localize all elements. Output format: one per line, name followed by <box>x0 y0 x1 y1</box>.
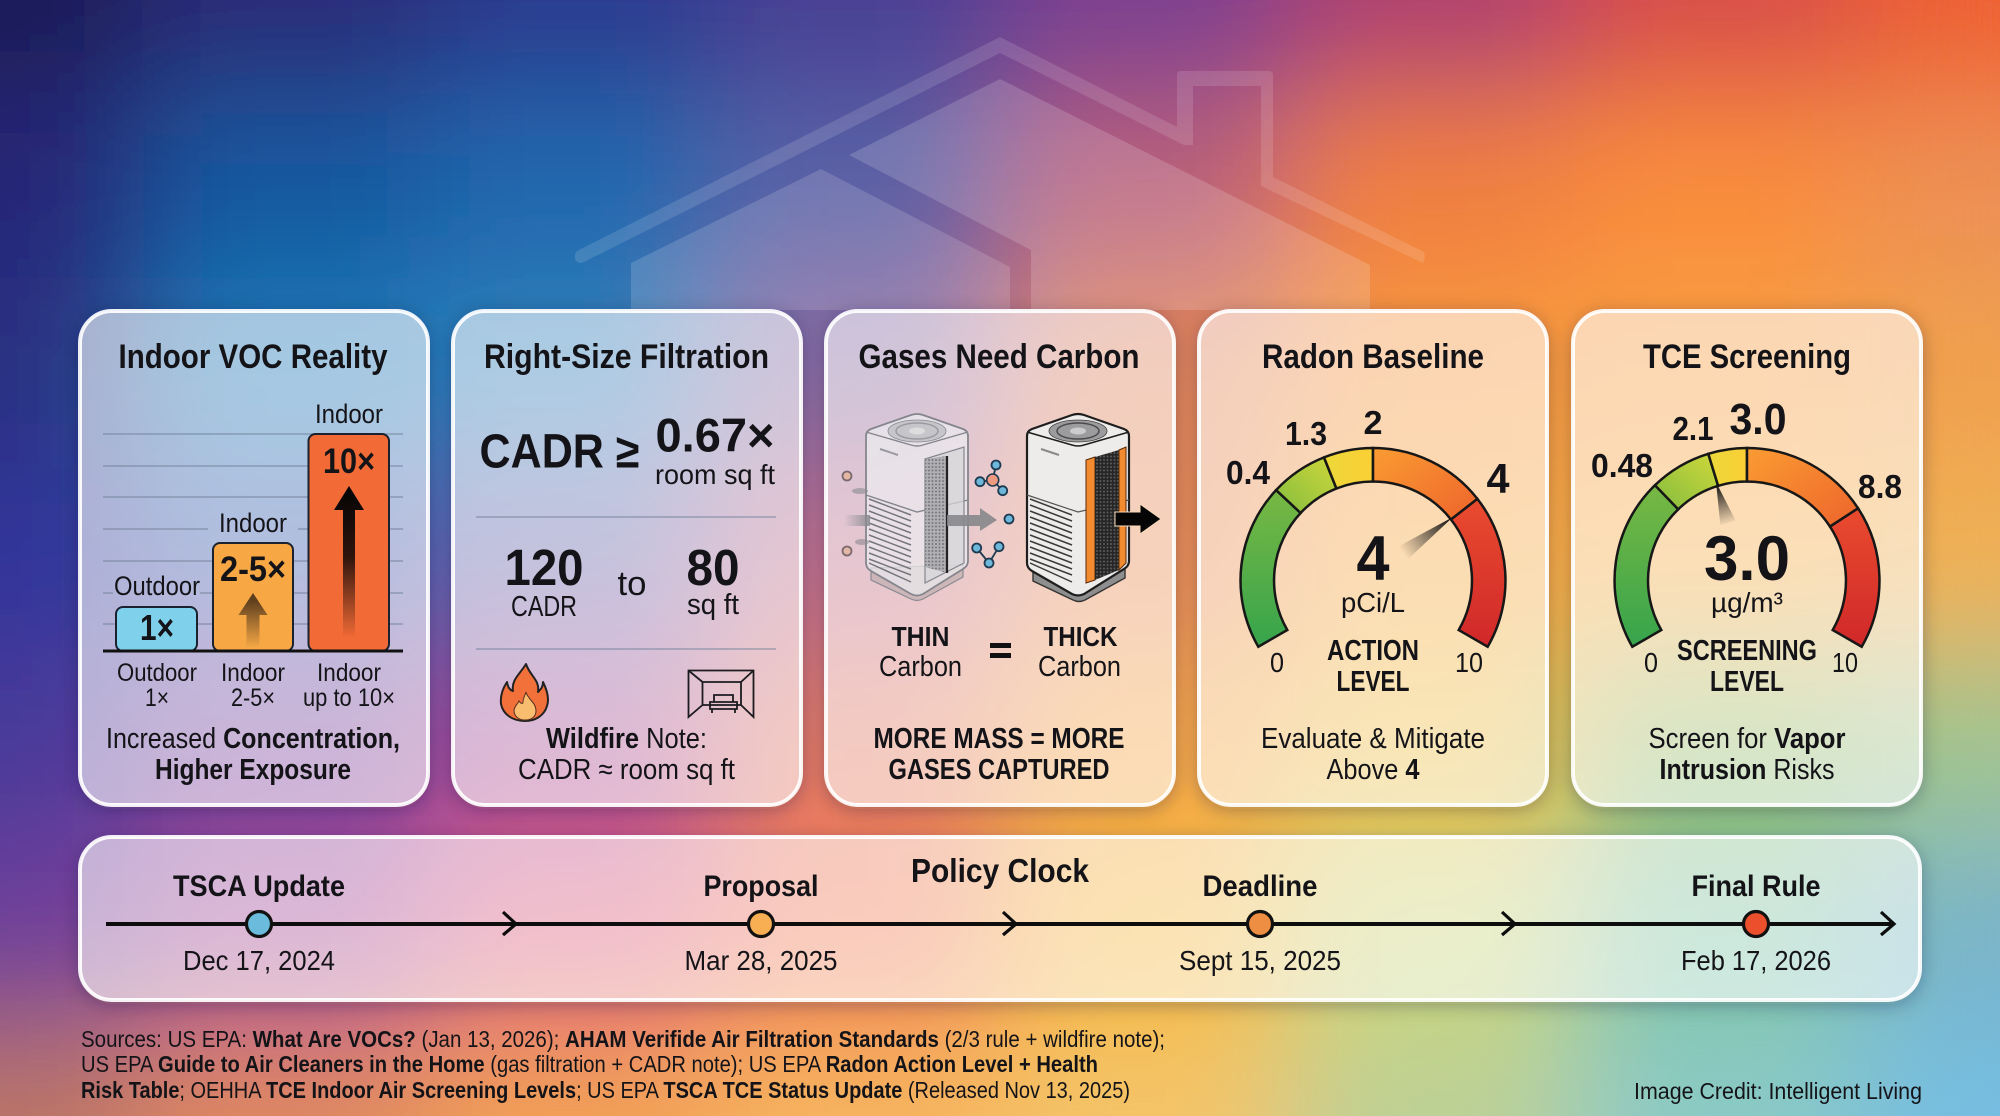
gauge: radon: pCi/L <box>1341 587 1405 618</box>
wildfire note: Wildfire Note: <box>546 723 707 755</box>
gauge: TCE: SCREENING <box>1677 635 1817 667</box>
gauge: TCE: 2.1 <box>1672 410 1714 447</box>
card background <box>80 311 428 805</box>
axis labels: Indoor <box>221 659 285 687</box>
gauge: radon <box>1226 404 1510 698</box>
bar: outdoor: Outdoor <box>114 571 200 601</box>
bar: indoor 10x: 10× <box>323 442 375 481</box>
axis labels: 1× <box>145 684 169 712</box>
gauge needle <box>1716 482 1736 525</box>
card background <box>1199 311 1547 805</box>
bar: indoor 2-5x: Indoor <box>219 508 287 538</box>
icon: thin carbon purifier <box>866 414 968 600</box>
caption: Higher Exposure <box>155 754 351 786</box>
heading: Gases Need Carbon <box>858 338 1140 376</box>
axis labels: Indoor <box>317 659 381 687</box>
formula: room sq ft <box>655 459 775 490</box>
heading: TCE Screening <box>1643 338 1851 376</box>
card shadows <box>80 315 1921 1004</box>
caption: Screen for Vapor <box>1648 723 1846 755</box>
comparison labels: THICK <box>1044 621 1118 652</box>
panel: Right-Size Filtration <box>453 311 801 805</box>
heading: Policy Clock <box>911 852 1090 889</box>
example ratio: CADR <box>511 591 577 623</box>
caption: MORE MASS = MORE <box>874 723 1124 755</box>
caption: Intrusion Risks <box>1660 754 1834 786</box>
gauge: TCE: 8.8 <box>1858 468 1902 505</box>
panel: Indoor VOC Reality <box>80 311 428 805</box>
icon: flame <box>501 664 548 721</box>
bar: indoor 10x <box>308 399 389 651</box>
caption <box>874 723 1124 786</box>
icon: background house silhouette <box>575 37 1425 310</box>
comparison labels: Carbon <box>1038 651 1121 683</box>
gauge: radon: LEVEL <box>1336 666 1410 698</box>
heading: Indoor VOC Reality <box>118 338 388 376</box>
milestone: Final Rule <box>1681 870 1831 976</box>
sources: US EPA Guide to Air Cleaners in the Home (gas filtration + CADR note); US EPA Radon Action Level + Health <box>81 1051 1098 1077</box>
sources <box>81 1026 1165 1103</box>
milestone: Deadline <box>1179 870 1341 976</box>
example ratio: sq ft <box>687 589 739 621</box>
gauge: TCE: LEVEL <box>1710 666 1784 698</box>
milestone: Deadline: Deadline <box>1202 870 1318 903</box>
caption <box>1261 723 1485 786</box>
gauge: TCE: 3.0 <box>1730 395 1786 444</box>
bar: outdoor <box>114 571 200 651</box>
gauge: TCE: 0 <box>1644 647 1658 678</box>
example ratio: to <box>618 565 646 603</box>
bar chart <box>103 399 403 651</box>
caption <box>1648 723 1846 786</box>
heading: Radon Baseline <box>1262 338 1484 376</box>
sources: Risk Table; OEHHA TCE Indoor Air Screening Levels; US EPA TSCA TCE Status Update (Released Nov 13, 2025) <box>81 1077 1130 1103</box>
image credit: Image Credit: Intelligent Living <box>1634 1078 1922 1104</box>
comparison labels <box>879 621 1121 683</box>
card background <box>1573 311 1921 805</box>
axis labels <box>117 659 395 712</box>
caption: Evaluate & Mitigate <box>1261 723 1485 755</box>
formula <box>480 408 775 490</box>
gauge: TCE: 0.48 <box>1591 447 1653 484</box>
milestone: Final Rule: Feb 17, 2026 <box>1681 945 1831 976</box>
milestone: Final Rule: Final Rule <box>1692 870 1820 903</box>
panel: TCE Screening <box>1573 311 1921 805</box>
gauge: radon: 4 <box>1356 524 1390 594</box>
bar: outdoor: 1× <box>140 607 174 648</box>
milestone: Deadline: Sept 15, 2025 <box>1179 945 1341 976</box>
wildfire note: CADR ≈ room sq ft <box>518 754 735 786</box>
heading: Right-Size Filtration <box>484 338 769 376</box>
milestone: Proposal: Proposal <box>704 870 818 903</box>
gauge: radon: 0.4 <box>1226 454 1271 491</box>
gauge: radon: 10 <box>1455 647 1483 678</box>
gauge: TCE: 3.0 <box>1704 524 1790 594</box>
panel: Radon Baseline <box>1199 311 1547 805</box>
panel: Gases Need Carbon <box>826 311 1174 805</box>
comparison labels: Carbon <box>879 651 962 683</box>
example ratio <box>504 539 740 623</box>
card background <box>826 311 1174 805</box>
example ratio: 120 <box>504 539 584 596</box>
card background <box>80 837 1920 1000</box>
bar: indoor 2-5x: 2-5× <box>220 550 286 589</box>
wildfire note <box>518 723 735 786</box>
sources: Sources: US EPA: What Are VOCs? (Jan 13, 2026); AHAM Verifide Air Filtration Standards (2/3 rule + wildfire note); <box>81 1026 1165 1052</box>
example ratio: 80 <box>686 539 740 596</box>
icon: thick carbon purifier <box>1027 414 1161 602</box>
panel: Policy Clock timeline <box>80 837 1920 1000</box>
milestone: TSCA Update: TSCA Update <box>173 870 345 903</box>
gauge: radon: 0 <box>1270 647 1284 678</box>
gauge: TCE <box>1591 395 1902 698</box>
gauge: radon: 1.3 <box>1285 415 1327 452</box>
icon: room with bed <box>688 670 754 717</box>
axis labels: up to 10× <box>303 684 395 712</box>
bar: indoor 10x: Indoor <box>315 399 383 429</box>
milestone: Proposal: Mar 28, 2025 <box>684 945 838 976</box>
gauge: TCE: µg/m³ <box>1711 587 1783 618</box>
comparison labels: THIN <box>892 621 950 652</box>
formula: 0.67× <box>656 408 774 462</box>
milestone: TSCA Update: Dec 17, 2024 <box>183 945 335 976</box>
gauge: radon: 4 <box>1486 455 1510 502</box>
bar: indoor 2-5x <box>213 508 293 651</box>
formula: CADR ≥ <box>480 426 640 478</box>
caption: GASES CAPTURED <box>888 754 1110 786</box>
milestone: TSCA Update <box>173 870 345 976</box>
gauge: radon: ACTION <box>1327 635 1419 667</box>
caption: Increased Concentration, <box>106 723 400 755</box>
gauge needle <box>1398 517 1453 560</box>
card background <box>453 311 801 805</box>
milestone: Proposal <box>684 870 838 976</box>
timeline arrow <box>106 912 1894 935</box>
axis labels: 2-5× <box>231 684 275 712</box>
axis labels: Outdoor <box>117 659 197 687</box>
gauge: radon: 2 <box>1364 404 1382 441</box>
caption <box>106 723 400 786</box>
caption: Above 4 <box>1326 754 1420 786</box>
gauge: TCE: 10 <box>1832 647 1858 678</box>
icon: air flow and molecules <box>842 460 1014 568</box>
